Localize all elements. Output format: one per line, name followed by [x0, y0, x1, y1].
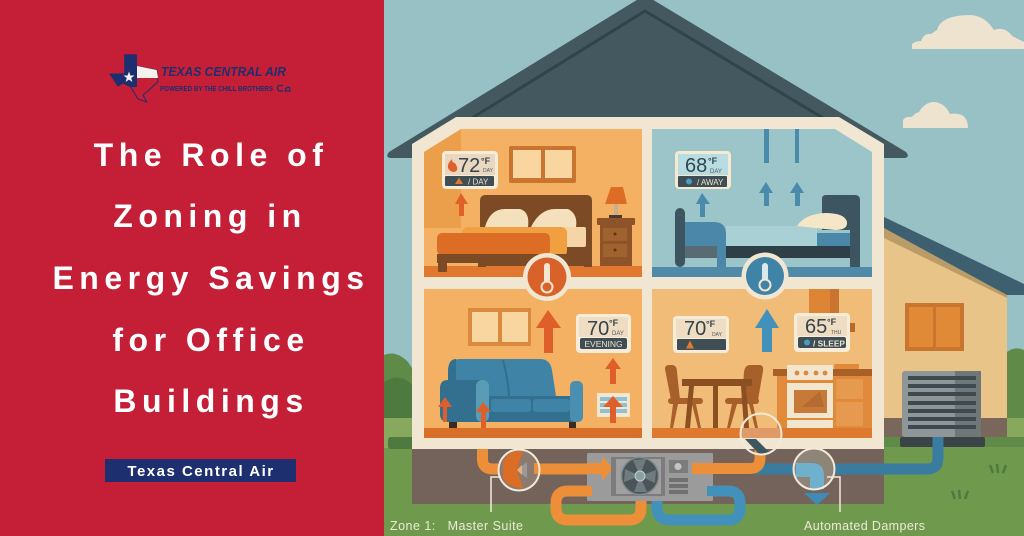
annex window	[905, 303, 964, 351]
thermostat: 70°F: °F	[706, 319, 716, 329]
damper: automated	[794, 448, 834, 490]
badge: Texas Central Air: Texas Central Air	[127, 463, 275, 480]
annex building	[884, 217, 1024, 447]
floor vent	[597, 393, 630, 417]
title: The Role of	[94, 137, 328, 173]
label: Automated Dampers: Automated Dampers	[804, 519, 925, 533]
thermostat: 65°F sleep: 65	[805, 316, 827, 338]
thermostat: 70°F evening: DAY	[612, 331, 624, 337]
title: Energy Savings	[52, 260, 370, 296]
ductwork	[482, 437, 938, 520]
thermostat: 68°F away: 68	[685, 155, 707, 177]
arrow from vent	[603, 396, 623, 423]
arrow up	[455, 193, 468, 216]
trees	[384, 348, 1024, 440]
panel: zone 3 living room	[424, 289, 642, 438]
thermostat: 70°F: 70	[684, 318, 706, 340]
thermostat: 70°F evening	[576, 314, 631, 353]
thermometer badge: orange	[523, 253, 571, 301]
air handler unit	[587, 453, 713, 501]
logo: Texas Central Air: POWERED BY THE CHILL BROTHERS	[160, 84, 273, 93]
title	[52, 137, 370, 419]
dining table and chairs	[665, 365, 763, 428]
bed	[675, 195, 860, 267]
house wall frame	[412, 117, 884, 449]
thermostat: 72°F day: / DAY	[468, 178, 489, 186]
roof	[387, 0, 908, 158]
thermostat: 70°F evening: 70	[587, 318, 609, 340]
window	[468, 308, 531, 346]
thermostat: 68°F away: DAY	[710, 169, 722, 175]
thermostat: 72°F day: DAY	[483, 168, 494, 174]
thermostat: 72°F day: °F	[481, 156, 491, 166]
thermostat: 70°F: DAY	[712, 332, 723, 338]
heat arrows	[438, 358, 621, 428]
fan	[622, 458, 658, 494]
big blue arrow up	[755, 309, 779, 352]
thermostat: 72°F day: 72	[458, 155, 480, 177]
supply vents	[764, 129, 799, 163]
logo: Texas Central Air: TEXAS CENTRAL AIR	[161, 65, 286, 79]
outdoor AC unit	[900, 371, 985, 447]
logo: Texas Central Air	[110, 55, 290, 102]
panel: zone 4 kitchen	[652, 289, 872, 438]
window	[509, 146, 576, 183]
nightstand and lamp	[597, 187, 635, 266]
thermostat: 65°F sleep	[794, 313, 850, 352]
thermostat: 68°F away: / AWAY	[697, 178, 724, 187]
sofa	[440, 359, 583, 428]
thermostat: 65°F sleep: °F	[827, 317, 837, 327]
leader line: dampers	[827, 477, 840, 512]
big arrow up	[536, 310, 561, 353]
leader line: zone 1	[491, 477, 501, 512]
arrow down	[804, 493, 830, 505]
panel: zone 1 bedroom	[424, 129, 642, 277]
title: Zoning in	[113, 198, 307, 234]
thermometer badge: blue	[742, 252, 788, 300]
crawl space	[412, 449, 884, 504]
thermostat: 68°F away	[675, 151, 731, 189]
icon: large cloud	[912, 15, 1024, 49]
badge: Texas Central Air	[105, 459, 296, 482]
thermostat: 70°F	[673, 316, 729, 353]
thermostat: 72°F day	[442, 151, 498, 189]
thermostat: 68°F away: °F	[708, 156, 718, 166]
thermostat: 70°F evening: °F	[609, 318, 619, 328]
ground: grass	[384, 418, 1024, 536]
thermostat: 65°F sleep: / SLEEP	[813, 338, 845, 348]
arrows up	[696, 182, 804, 217]
title: for Office	[112, 322, 310, 358]
range hood	[809, 289, 855, 332]
thermostat: 70°F evening: EVENING	[584, 339, 623, 349]
bed	[437, 195, 592, 272]
damper: zone 1	[498, 450, 540, 490]
kitchen stove and counter	[773, 364, 872, 428]
label: Zone 1 Master Suite: Zone 1: Master Suite	[390, 519, 523, 533]
damper: kitchen	[740, 414, 782, 455]
title: Buildings	[113, 383, 309, 419]
icon: small cloud	[903, 102, 968, 128]
thermostat: 65°F sleep: THU	[831, 330, 842, 336]
panel: sky background	[384, 0, 1024, 536]
panel: red title panel	[0, 0, 384, 536]
panel: zone 2 bedroom	[652, 129, 872, 277]
